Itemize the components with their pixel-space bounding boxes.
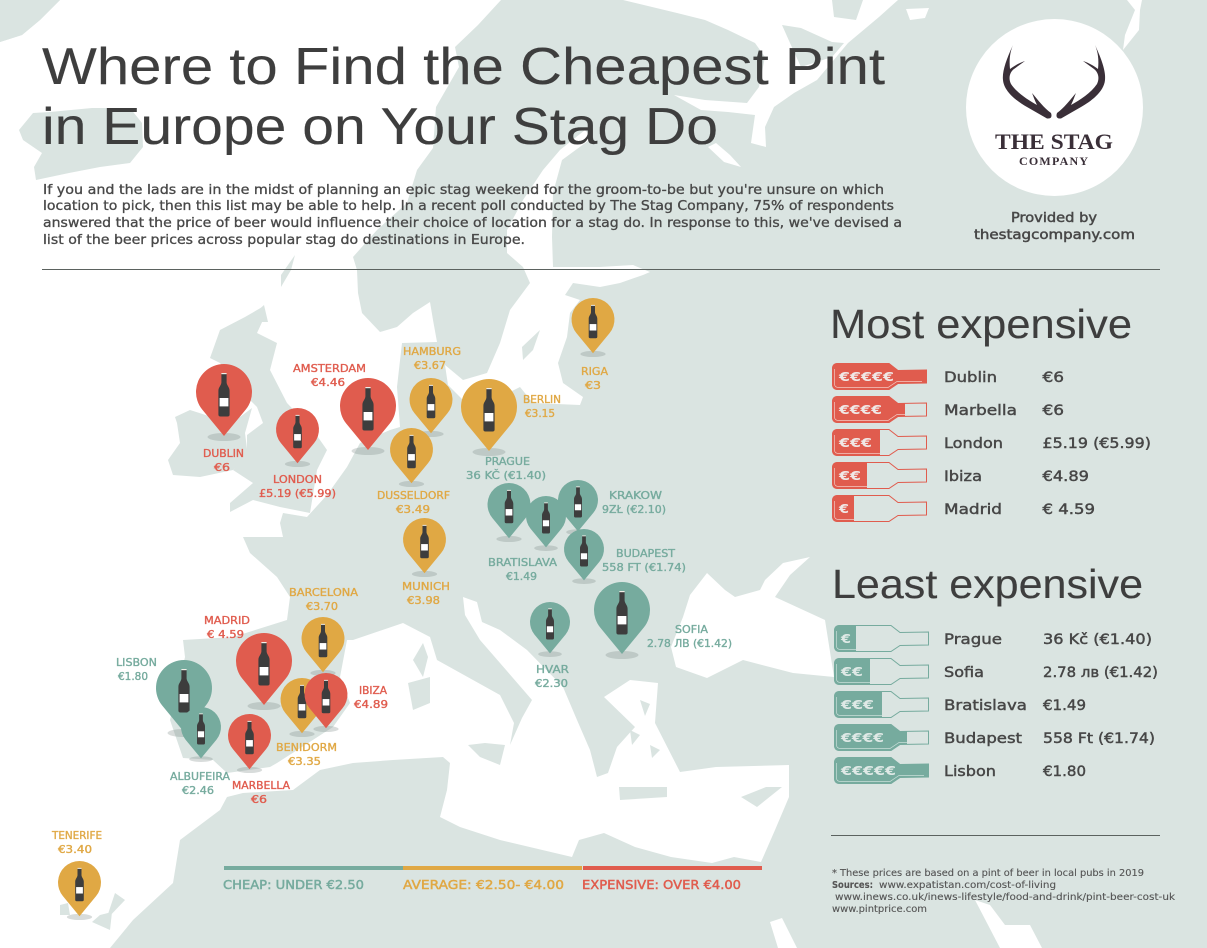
footnote and sources: www.inews.co.uk/inews-lifestyle/food-and-drink/pint-beer-cost-uk <box>835 892 1176 903</box>
row: Prague: € <box>840 632 851 646</box>
pin: Berlin <box>461 379 517 456</box>
label: Barcelona: BARCELONA <box>289 587 359 599</box>
heading: least expensive: Least expensive <box>832 561 1143 607</box>
pin: Prague <box>488 483 530 542</box>
pin: Benidorm <box>281 678 323 737</box>
legend: price colour bands: CHEAP: UNDER €2.50 <box>223 878 364 892</box>
label: Amsterdam: €4.46 <box>311 377 345 389</box>
row: Sofia: 2.78 лв (€1.42) <box>1043 665 1158 681</box>
row: Budapest: 558 Ft (€1.74) <box>1043 731 1155 747</box>
row: Sofia <box>834 658 1158 685</box>
row: Sofia: €€ <box>840 665 863 679</box>
label: Prague <box>466 456 546 482</box>
label: Lisbon <box>116 657 157 683</box>
label: Budapest <box>602 548 686 574</box>
label: Riga: €3 <box>585 380 601 392</box>
row: Madrid <box>832 495 1095 522</box>
row: Bratislava: Bratislava <box>944 698 1027 714</box>
pin: Ibiza <box>305 673 347 732</box>
label: London: £5.19 (€5.99) <box>259 488 336 500</box>
label: Tenerife: €3.40 <box>58 844 92 856</box>
pin: Dublin <box>196 364 252 441</box>
intro text block: answered that the price of beer would influence their choice of location for a stag do. In response to this, we've devised a <box>43 215 902 231</box>
label: Munich <box>402 581 450 607</box>
row: Dublin <box>832 363 1064 390</box>
label: Barcelona: €3.70 <box>306 601 338 613</box>
row: Budapest: Budapest <box>944 731 1022 747</box>
row: Ibiza: Ibiza <box>944 469 982 485</box>
label: Benidorm: €3.35 <box>288 756 321 768</box>
provided by credit <box>974 210 1135 243</box>
logo: The Stag Company <box>966 19 1143 196</box>
label: Bratislava: €1.49 <box>506 571 537 583</box>
pin: Riga <box>572 298 614 357</box>
legend: price colour bands: AVERAGE: €2.50- €4.00 <box>403 878 564 892</box>
row: Lisbon: €€€€€ <box>840 764 896 778</box>
footnote and sources <box>832 868 1176 915</box>
pin: Munich <box>403 518 446 577</box>
pin: Budapest <box>564 529 604 584</box>
label: Ibiza <box>354 685 388 711</box>
label: Hvar: €2.30 <box>535 678 568 690</box>
pin: Lisbon <box>156 660 212 737</box>
pin: Madrid <box>236 633 292 710</box>
label: Munich: MUNICH <box>402 581 450 593</box>
logo: The Stag Company: COMPANY <box>1019 154 1088 168</box>
label: Dusseldorf: €3.49 <box>396 504 430 516</box>
label: Albufeira <box>170 771 231 797</box>
label: Hvar: HVAR <box>536 664 570 676</box>
pin: Sofia <box>594 582 650 659</box>
intro text block: list of the beer prices across popular stag do destinations in Europe. <box>43 232 525 248</box>
label: Prague: PRAGUE <box>485 456 530 468</box>
label: Berlin: BERLIN <box>523 394 561 406</box>
label: Madrid: MADRID <box>204 615 250 627</box>
panel: least expensive <box>832 561 1158 784</box>
intro text block: location to pick, then this list may be able to help. In a recent poll conducted by The Stag Company, 75% of respondents <box>43 198 894 214</box>
row: Dublin: €€€€€ <box>838 370 894 384</box>
row: Lisbon <box>834 757 1086 784</box>
footnote and sources: www.expatistan.com/cost-of-living <box>879 880 1056 891</box>
pin: Hamburg <box>410 378 452 437</box>
row: Bratislava <box>834 691 1086 718</box>
label: Munich: €3.98 <box>407 595 440 607</box>
label: Madrid: € 4.59 <box>207 629 244 641</box>
row: London: London <box>944 436 1003 452</box>
label: Amsterdam <box>293 363 366 389</box>
logo: The Stag Company: THE STAG <box>995 129 1113 154</box>
row: Budapest: €€€€ <box>840 731 884 745</box>
label: Barcelona <box>289 587 359 613</box>
row: Marbella <box>832 396 1064 423</box>
label: Bratislava <box>488 557 558 583</box>
provided by credit: thestagcompany.com <box>974 227 1135 243</box>
label: Dublin: DUBLIN <box>203 448 244 460</box>
row: Lisbon: Lisbon <box>944 764 996 780</box>
label: London <box>259 474 336 500</box>
row: Marbella: €6 <box>1042 403 1064 419</box>
label: Amsterdam: AMSTERDAM <box>293 363 366 375</box>
intro text block: If you and the lads are in the midst of planning an epic stag weekend for the groom-to-be but you're unsure on which <box>43 182 884 198</box>
label: Riga: RIGA <box>581 366 609 378</box>
row: Budapest <box>834 724 1155 751</box>
label: Ibiza: IBIZA <box>359 685 388 697</box>
row: Ibiza: €4.89 <box>1042 469 1089 485</box>
label: Berlin: €3.15 <box>525 408 555 420</box>
title: Where to Find the Cheapest Pint <box>42 38 886 96</box>
label: Ibiza: €4.89 <box>354 699 388 711</box>
title: in Europe on Your Stag Do <box>42 98 718 156</box>
label: Krakow <box>602 490 666 516</box>
row: Bratislava: €1.49 <box>1043 698 1086 714</box>
row: Madrid: € <box>838 502 849 516</box>
label: Prague: 36 KČ (€1.40) <box>466 469 546 482</box>
row: Sofia: Sofia <box>944 665 984 681</box>
pin: Marbella <box>228 714 271 773</box>
label: Krakow: 9ZŁ (€2.10) <box>602 504 666 516</box>
label: Marbella: €6 <box>251 794 267 806</box>
label: Dusseldorf: DUSSELDORF <box>377 490 450 502</box>
row: Marbella: Marbella <box>944 403 1017 419</box>
label: Madrid <box>204 615 250 641</box>
footnote and sources: * These prices are based on a pint of beer in local pubs in 2019 <box>832 868 1144 879</box>
row: Dublin: Dublin <box>944 370 997 386</box>
pin: Albufeira <box>181 707 221 762</box>
label: Albufeira: ALBUFEIRA <box>170 771 231 783</box>
row: Ibiza <box>832 462 1089 489</box>
row: London: £5.19 (€5.99) <box>1042 436 1151 452</box>
pin: Bratislava <box>526 496 566 551</box>
row: Dublin: €6 <box>1042 370 1064 386</box>
label: Hamburg: €3.67 <box>414 360 446 372</box>
label: Sofia: SOFIA <box>675 624 709 636</box>
row: Ibiza: €€ <box>838 469 861 483</box>
label: Lisbon: €1.80 <box>118 671 148 683</box>
row: London <box>832 429 1151 456</box>
label: Berlin <box>523 394 561 420</box>
label: Riga <box>581 366 609 392</box>
pin: Tenerife <box>58 861 101 920</box>
row: London: €€€ <box>838 436 872 450</box>
label: Marbella: MARBELLA <box>232 780 291 792</box>
label: Benidorm: BENIDORM <box>276 742 337 754</box>
label: Hamburg: HAMBURG <box>403 346 461 358</box>
pin: London <box>276 408 319 467</box>
label: Tenerife <box>51 830 102 856</box>
label: Dublin <box>203 448 244 474</box>
label: Hamburg <box>403 346 461 372</box>
row: Prague: 36 Kč (€1.40) <box>1043 632 1152 648</box>
legend: price colour bands: EXPENSIVE: OVER €4.00 <box>582 878 741 892</box>
row: Bratislava: €€€ <box>840 698 874 712</box>
intro text block <box>43 182 902 248</box>
provided by credit: Provided by <box>1011 210 1097 226</box>
pin: Dusseldorf <box>390 428 433 487</box>
pin: Barcelona <box>302 617 344 676</box>
label: Hvar <box>535 664 570 690</box>
label: London: LONDON <box>273 474 322 486</box>
pin: Amsterdam <box>340 378 396 455</box>
panel: most expensive <box>830 301 1151 522</box>
label: Sofia <box>647 624 732 650</box>
footnote and sources: www.pintprice.com <box>832 904 927 915</box>
label: Sofia: 2.78 ЛВ (€1.42) <box>647 638 732 650</box>
heading: most expensive: Most expensive <box>830 301 1132 347</box>
pin: Hvar <box>530 602 570 657</box>
row: Prague <box>834 625 1152 652</box>
label: Dusseldorf <box>377 490 450 516</box>
label: Benidorm <box>276 742 337 768</box>
label: Lisbon: LISBON <box>116 657 157 669</box>
label: Budapest: BUDAPEST <box>616 548 676 560</box>
footnote and sources: Sources: <box>832 880 873 891</box>
label: Krakow: KRAKOW <box>609 490 663 502</box>
pin: Krakow <box>558 480 598 535</box>
label: Marbella <box>232 780 291 806</box>
label: Albufeira: €2.46 <box>182 785 214 797</box>
row: Prague: Prague <box>944 632 1002 648</box>
icon: antlers <box>1003 45 1105 119</box>
row: Madrid: Madrid <box>944 502 1002 518</box>
row: Marbella: €€€€ <box>838 403 882 417</box>
label: Tenerife: TENERIFE <box>51 830 102 842</box>
row: Lisbon: €1.80 <box>1043 764 1086 780</box>
label: Bratislava: BRATISLAVA <box>488 557 558 569</box>
label: Dublin: €6 <box>214 462 230 474</box>
label: Budapest: 558 FT (€1.74) <box>602 562 686 574</box>
row: Madrid: € 4.59 <box>1042 502 1095 518</box>
legend: price colour bands <box>223 866 762 892</box>
title <box>42 38 886 156</box>
